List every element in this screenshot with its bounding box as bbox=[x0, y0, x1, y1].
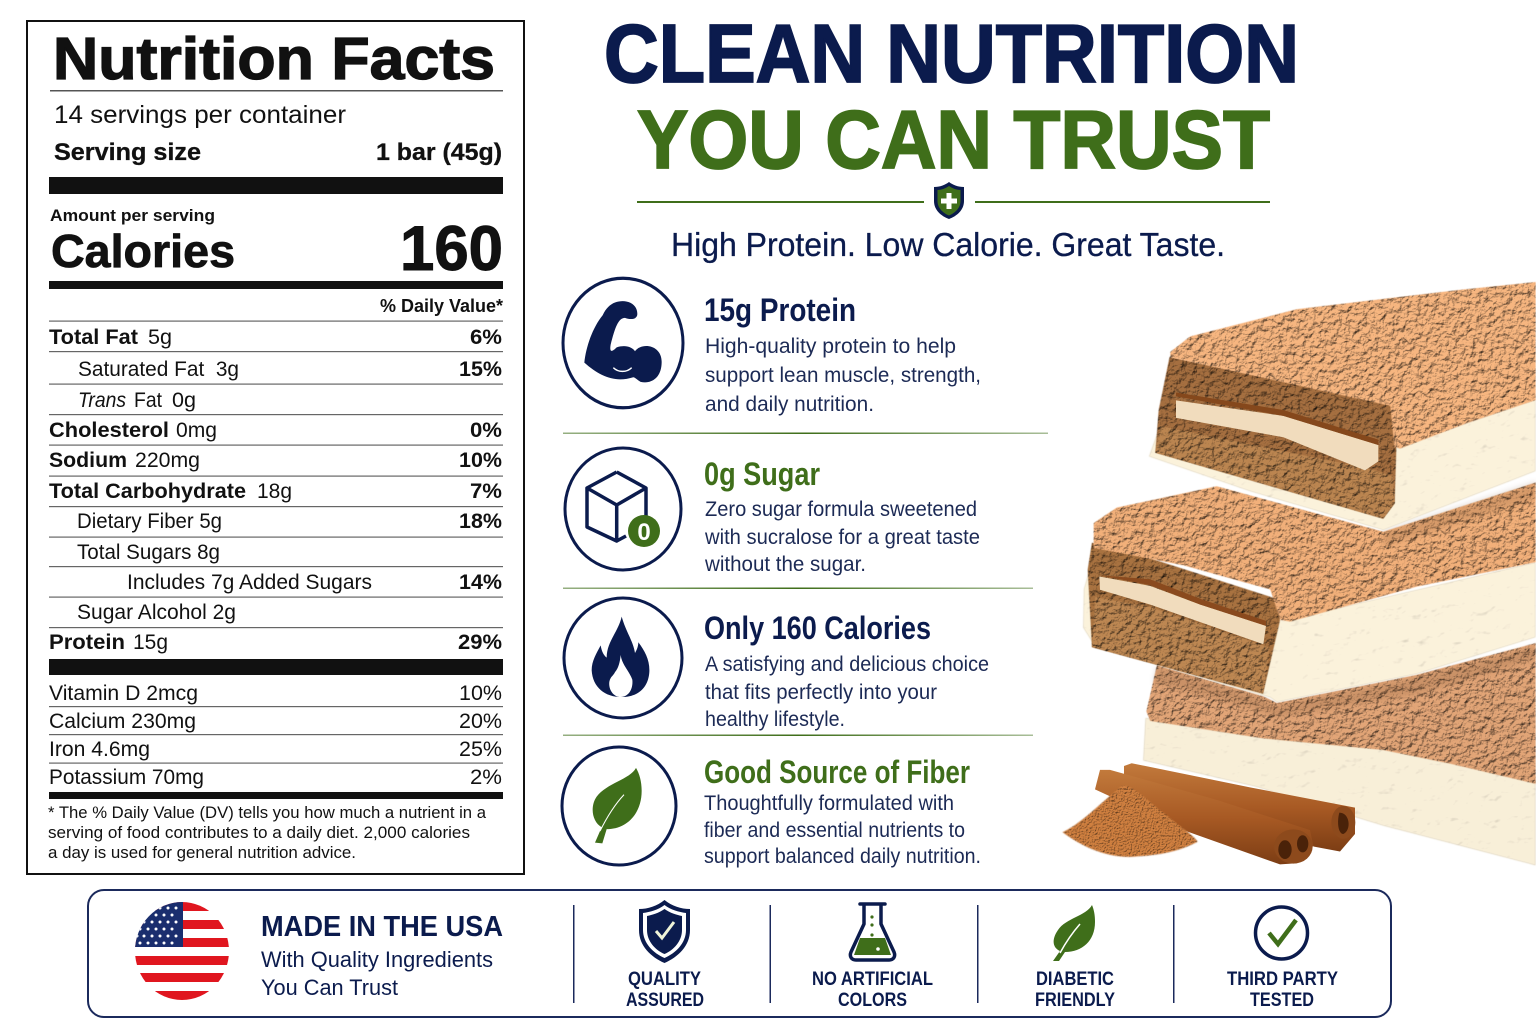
icon: sugar cube with zero badge bbox=[565, 448, 681, 570]
badge frame bbox=[88, 890, 1391, 1017]
footnote: * The % Daily Value (DV) tells you how much a nutrient in a bbox=[48, 804, 487, 822]
row: potassium bbox=[49, 765, 502, 789]
amount per serving: Amount per serving bbox=[50, 206, 215, 225]
image: stacked protein bars with cinnamon bbox=[1062, 282, 1536, 866]
footnote: a day is used for general nutrition advice. bbox=[48, 844, 356, 862]
description bbox=[704, 791, 981, 868]
row: calcium: 20% bbox=[459, 709, 502, 733]
row: vitamin d: 10% bbox=[459, 681, 502, 705]
row: trans fat: Trans bbox=[78, 388, 126, 412]
row: trans fat: 0g bbox=[172, 388, 196, 412]
row: protein: Protein bbox=[49, 630, 125, 654]
row: sugar alcohol: Sugar Alcohol 2g bbox=[77, 600, 236, 624]
row: cholesterol: Cholesterol bbox=[49, 418, 169, 442]
row: total carbohydrate: 7% bbox=[470, 479, 502, 503]
icon: muscle arm bbox=[563, 278, 683, 408]
row: sodium: 10% bbox=[459, 448, 502, 472]
row: total fat: 6% bbox=[470, 325, 502, 349]
row: cholesterol bbox=[49, 418, 502, 442]
row: sodium: Sodium bbox=[49, 448, 127, 472]
row: sodium bbox=[49, 448, 502, 472]
row: sodium: 220mg bbox=[135, 448, 200, 472]
serving size row: Serving size bbox=[54, 139, 201, 166]
panel: nutrition facts label bbox=[27, 21, 524, 874]
description: support balanced daily nutrition. bbox=[704, 844, 981, 868]
row: calcium bbox=[49, 709, 502, 733]
description bbox=[705, 334, 981, 416]
badge: diabetic friendly bbox=[1035, 905, 1115, 1011]
heading: 0g Sugar bbox=[704, 456, 820, 492]
title: CLEAN NUTRITION bbox=[604, 7, 1299, 100]
serving size row: 1 bar (45g) bbox=[376, 139, 502, 166]
icon: usa flag bbox=[135, 902, 229, 1000]
badge: third party tested: THIRD PARTY bbox=[1227, 969, 1338, 990]
cinnamon sticks bbox=[1095, 763, 1355, 864]
description: and daily nutrition. bbox=[705, 392, 874, 416]
row: iron bbox=[49, 737, 502, 761]
description bbox=[704, 497, 980, 576]
calories row bbox=[51, 214, 503, 284]
made in the usa text: You Can Trust bbox=[261, 975, 398, 1000]
bottom bar bbox=[1143, 643, 1536, 866]
row: added sugars bbox=[127, 570, 502, 594]
feature: 15g protein bbox=[563, 278, 981, 416]
row: total fat bbox=[49, 325, 502, 349]
title bbox=[604, 7, 1299, 186]
row: total carbohydrate: Total Carbohydrate bbox=[49, 479, 246, 503]
row: vitamin d bbox=[49, 681, 502, 705]
description: healthy lifestyle. bbox=[705, 707, 845, 731]
description: that fits perfectly into your bbox=[705, 680, 937, 704]
title divider with shield bbox=[637, 182, 1270, 219]
badge: no artificial colors: NO ARTIFICIAL bbox=[812, 969, 933, 990]
description: without the sugar. bbox=[704, 552, 866, 576]
row: added sugars: 14% bbox=[459, 570, 502, 594]
row: iron: 25% bbox=[459, 737, 502, 761]
footnote bbox=[48, 804, 487, 862]
badge: diabetic friendly: FRIENDLY bbox=[1035, 990, 1115, 1011]
row: total fat: 5g bbox=[148, 325, 172, 349]
row: cholesterol: 0mg bbox=[176, 418, 217, 442]
top bar bbox=[1148, 282, 1536, 531]
cinnamon powder bbox=[1062, 785, 1198, 857]
calories row: Calories bbox=[51, 225, 235, 277]
daily value header: % Daily Value* bbox=[380, 296, 503, 316]
description: Thoughtfully formulated with bbox=[704, 791, 954, 815]
middle bar bbox=[1083, 482, 1536, 703]
row: total carbohydrate: 18g bbox=[257, 479, 292, 503]
badge: quality assured bbox=[626, 900, 704, 1011]
row: total sugars: Total Sugars 8g bbox=[77, 540, 220, 564]
badge: quality assured: QUALITY bbox=[628, 969, 701, 990]
row: saturated fat: 15% bbox=[459, 357, 502, 381]
label frame bbox=[27, 21, 524, 874]
subtitle: High Protein. Low Calorie. Great Taste. bbox=[671, 226, 1225, 263]
heading: Only 160 Calories bbox=[704, 610, 931, 646]
row: total carbohydrate bbox=[49, 479, 502, 503]
row: dietary fiber: 18% bbox=[459, 509, 502, 533]
badge: quality assured: ASSURED bbox=[626, 990, 704, 1011]
row: saturated fat bbox=[78, 357, 502, 381]
description: support lean muscle, strength, bbox=[705, 363, 981, 387]
footnote: serving of food contributes to a daily diet. 2,000 calories bbox=[48, 824, 470, 842]
servings per container: 14 servings per container bbox=[54, 101, 346, 129]
made in the usa text: MADE IN THE USA bbox=[261, 911, 503, 943]
row: vitamin d: Vitamin D 2mcg bbox=[49, 681, 198, 705]
heading: Nutrition Facts: Nutrition Facts bbox=[53, 26, 495, 92]
badge: no artificial colors bbox=[812, 904, 933, 1011]
serving size row bbox=[54, 139, 502, 166]
row: added sugars: Includes 7g Added Sugars bbox=[127, 570, 372, 594]
title: YOU CAN TRUST bbox=[637, 93, 1270, 186]
icon: shield with plus bbox=[934, 182, 964, 219]
badge: diabetic friendly: DIABETIC bbox=[1036, 969, 1114, 990]
heading: 15g Protein bbox=[704, 292, 856, 328]
row: saturated fat: Saturated Fat 3g bbox=[78, 357, 239, 381]
feature: only 160 calories bbox=[564, 598, 989, 731]
description: with sucralose for a great taste bbox=[704, 525, 980, 549]
description: High-quality protein to help bbox=[705, 334, 956, 358]
row: trans fat: Fat bbox=[134, 388, 162, 412]
panel: trust badges bbox=[88, 890, 1391, 1017]
description: Zero sugar formula sweetened bbox=[705, 497, 977, 521]
row: calcium: Calcium 230mg bbox=[49, 709, 196, 733]
feature: good source of fiber bbox=[562, 747, 981, 868]
row: trans fat bbox=[78, 388, 196, 412]
badge: third party tested: TESTED bbox=[1250, 990, 1314, 1011]
row: potassium: 2% bbox=[470, 765, 502, 789]
description: fiber and essential nutrients to bbox=[704, 818, 965, 842]
icon: leaf bbox=[562, 747, 676, 865]
row: dietary fiber bbox=[77, 509, 502, 533]
row: dietary fiber: Dietary Fiber 5g bbox=[77, 509, 222, 533]
icon: flame bbox=[564, 598, 682, 718]
row: cholesterol: 0% bbox=[470, 418, 502, 442]
description: A satisfying and delicious choice bbox=[705, 652, 989, 676]
row: protein: 15g bbox=[133, 630, 168, 654]
badge: third party tested bbox=[1227, 907, 1338, 1011]
feature: 0g sugar bbox=[565, 448, 980, 576]
made in the usa text: With Quality Ingredients bbox=[261, 947, 493, 972]
row: protein bbox=[49, 630, 502, 654]
icon: sugar cube with zero badge: 0 bbox=[637, 519, 651, 546]
calories row: 160 bbox=[400, 214, 503, 284]
made in the usa text bbox=[261, 911, 503, 1000]
badge: no artificial colors: COLORS bbox=[838, 990, 907, 1011]
row: iron: Iron 4.6mg bbox=[49, 737, 150, 761]
row: potassium: Potassium 70mg bbox=[49, 765, 204, 789]
heading: Good Source of Fiber bbox=[704, 754, 970, 790]
row: total fat: Total Fat bbox=[49, 325, 138, 349]
description bbox=[705, 652, 989, 731]
row: protein: 29% bbox=[458, 630, 502, 654]
